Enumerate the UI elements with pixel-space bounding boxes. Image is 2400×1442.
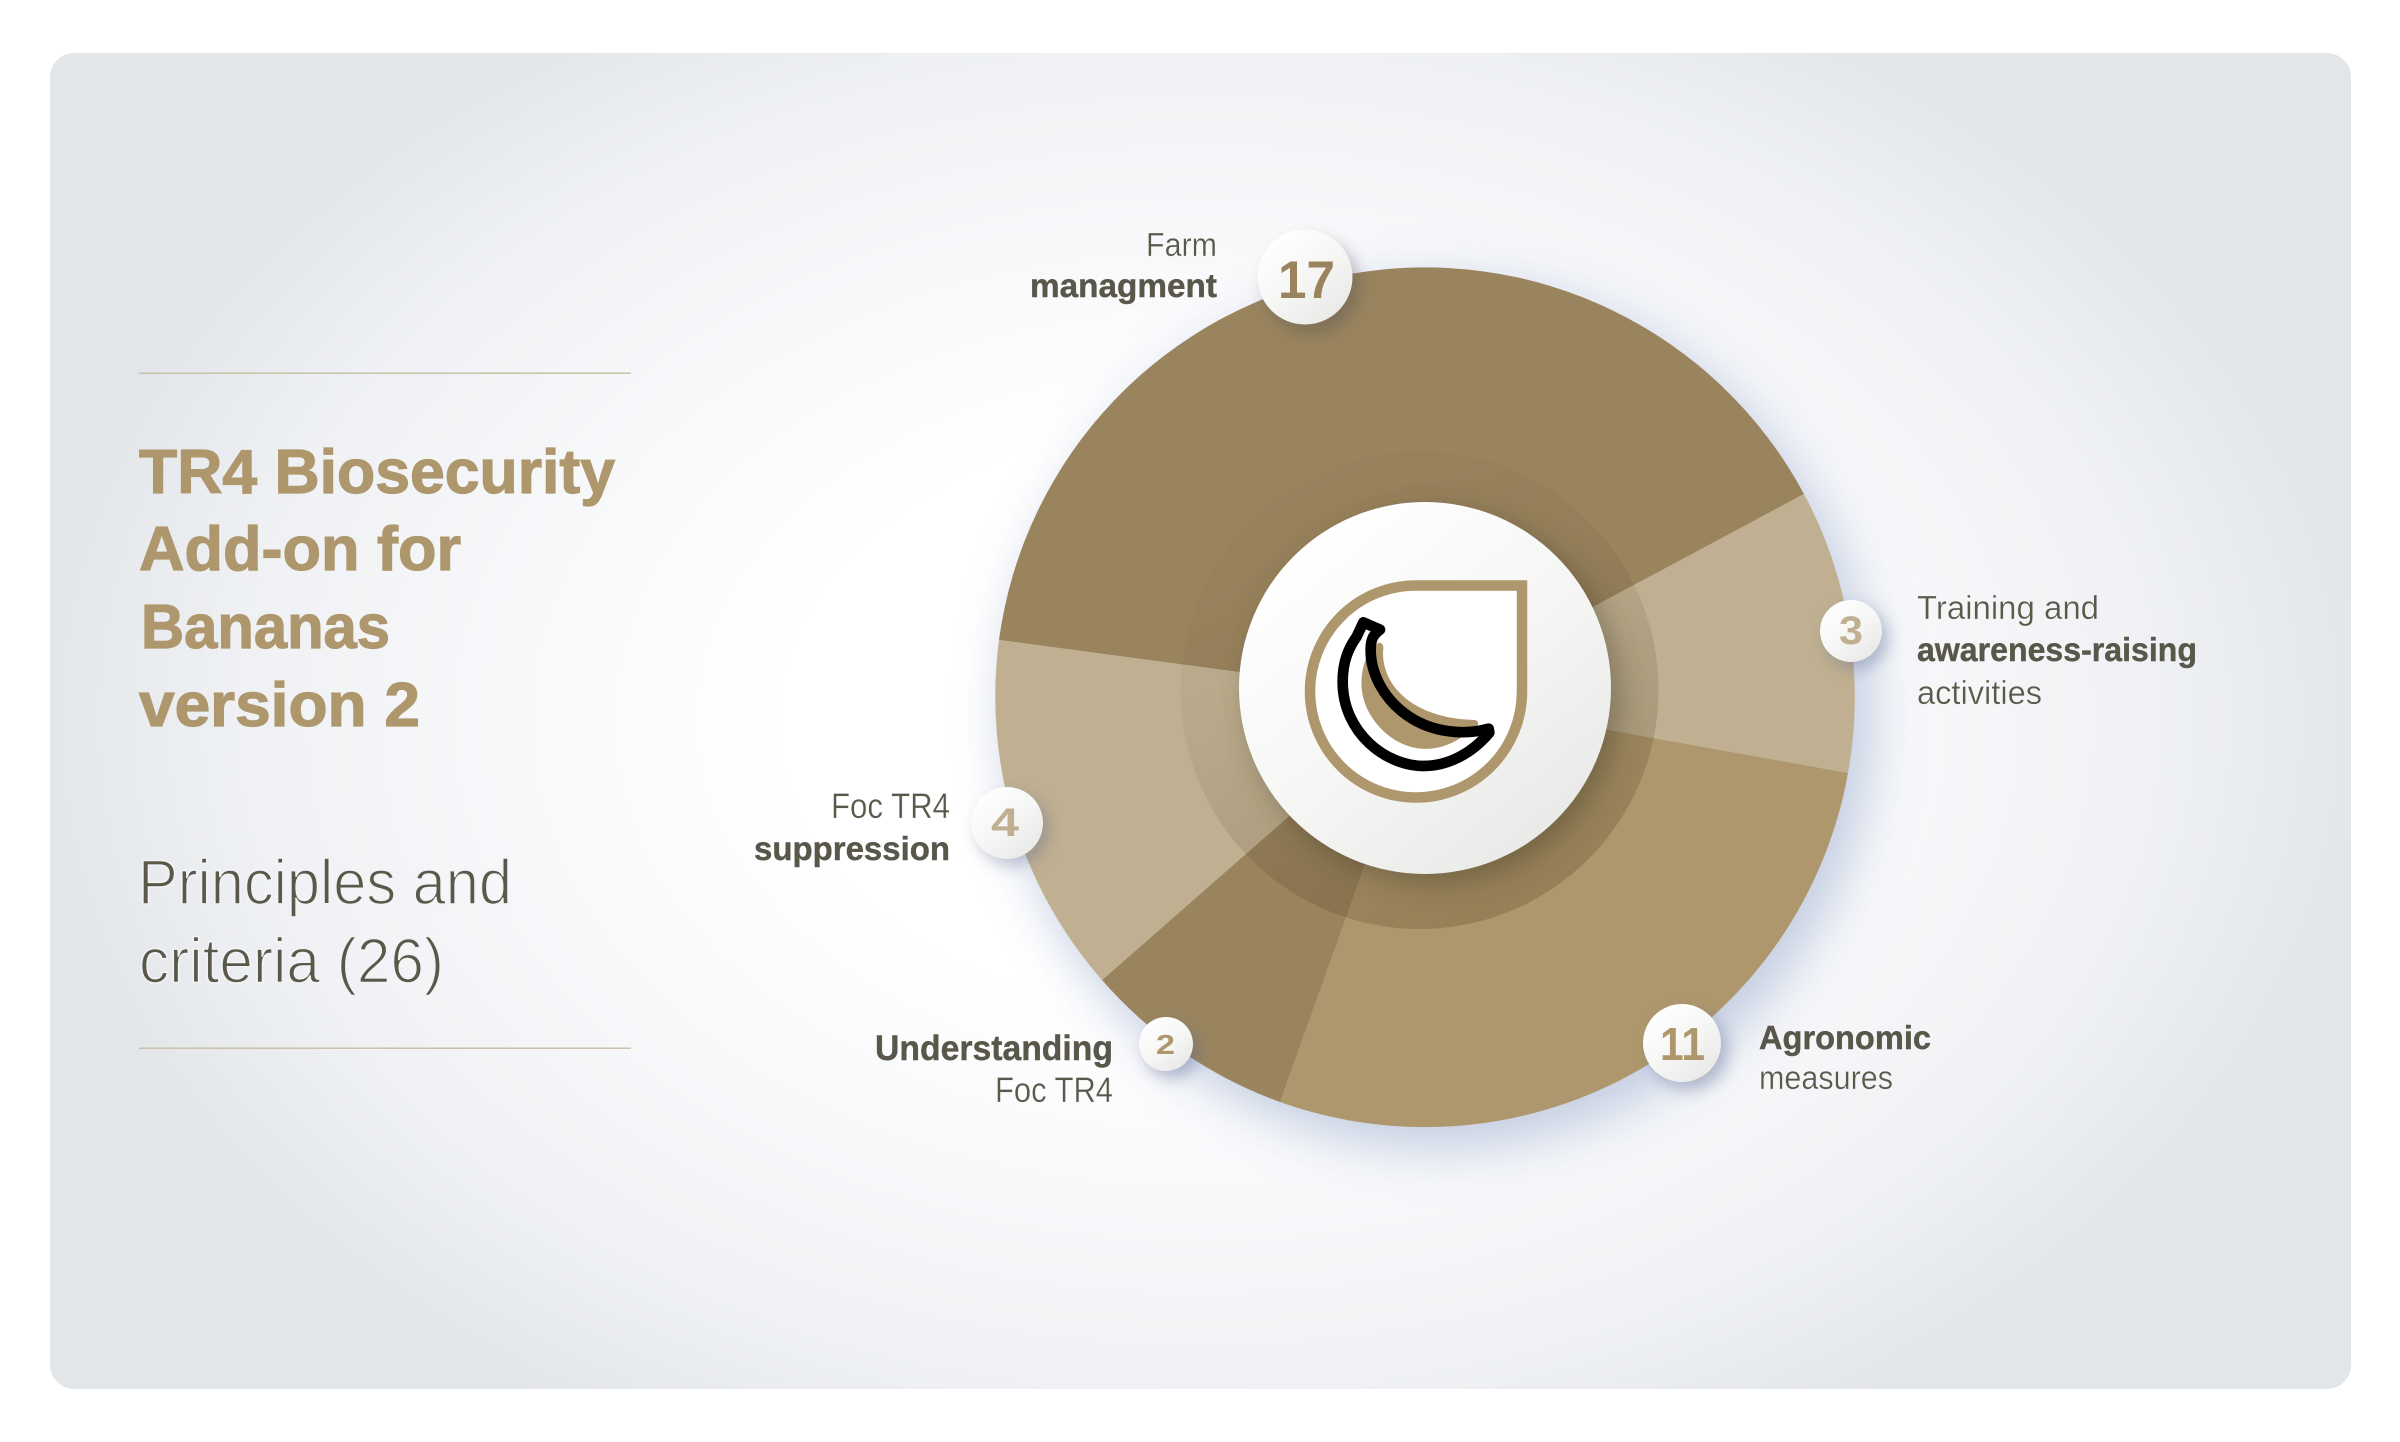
- badge: 17: 17: [1278, 251, 1335, 310]
- segment: Agronomic measures: [1280, 697, 1848, 1127]
- badge: 11: 11: [1660, 1018, 1705, 1070]
- badge: 4: [971, 787, 1049, 866]
- icon: banana in leaf drop: [1310, 586, 1522, 798]
- title: TR4 Biosecurity: [139, 438, 616, 507]
- segment: Foc TR4 suppression: [995, 640, 1425, 980]
- badge: 2: [1139, 1017, 1199, 1078]
- badge: 3: 3: [1839, 609, 1863, 653]
- title: Bananas: [141, 593, 390, 662]
- label: Farm managment: Farm: [1146, 226, 1217, 263]
- title: Add-on for: [139, 515, 461, 584]
- badge: 11: [1643, 1004, 1728, 1090]
- badge: 3: [1820, 600, 1888, 669]
- label: Agronomic measures: [1759, 1019, 1931, 1096]
- centre disc: [1239, 502, 1611, 874]
- badge: 17: [1258, 230, 1359, 333]
- badge: 4: 4: [991, 801, 1020, 845]
- label: Farm managment: managment: [1030, 267, 1217, 304]
- title: [139, 438, 616, 740]
- subtitle: [138, 848, 512, 996]
- label: Training and awareness-raising activities: Training and: [1917, 589, 2099, 626]
- label: Foc TR4 suppression: Foc TR4: [831, 787, 950, 826]
- donut chart: 5 segments: [995, 267, 1871, 1148]
- label: Understanding Foc TR4: Understanding: [875, 1029, 1113, 1068]
- label: Understanding Foc TR4: Foc TR4: [995, 1071, 1113, 1110]
- label: Farm managment: [1030, 226, 1217, 304]
- banana shading: [1361, 643, 1478, 749]
- top divider line: [139, 372, 631, 374]
- label: Understanding Foc TR4: [875, 1029, 1113, 1110]
- bottom divider line: [139, 1048, 631, 1049]
- label: Training and awareness-raising activities: activities: [1917, 674, 2042, 711]
- pie shadow: [1007, 284, 1871, 1148]
- centre shadow: [1248, 511, 1620, 883]
- banana outline: [1343, 622, 1489, 766]
- label: Foc TR4 suppression: [754, 787, 950, 867]
- label: Agronomic measures: Agronomic: [1759, 1019, 1931, 1056]
- badge: 2: 2: [1156, 1029, 1175, 1060]
- label: Training and awareness-raising activities: awareness-raising: [1917, 631, 2197, 668]
- segment: Training and awareness-raising activities: [1425, 494, 1855, 773]
- segment: Understanding Foc TR4: [1102, 697, 1425, 1102]
- label: Agronomic measures: measures: [1759, 1059, 1893, 1096]
- segment: Farm managment: [999, 267, 1804, 697]
- label: Foc TR4 suppression: suppression: [754, 830, 950, 867]
- inner translucent ring: [1180, 451, 1658, 929]
- subtitle: criteria (26): [139, 926, 444, 996]
- drop outline: [1310, 586, 1522, 798]
- label: Training and awareness-raising activities: [1917, 589, 2197, 711]
- subtitle: Principles and: [138, 848, 512, 918]
- title: version 2: [139, 671, 420, 740]
